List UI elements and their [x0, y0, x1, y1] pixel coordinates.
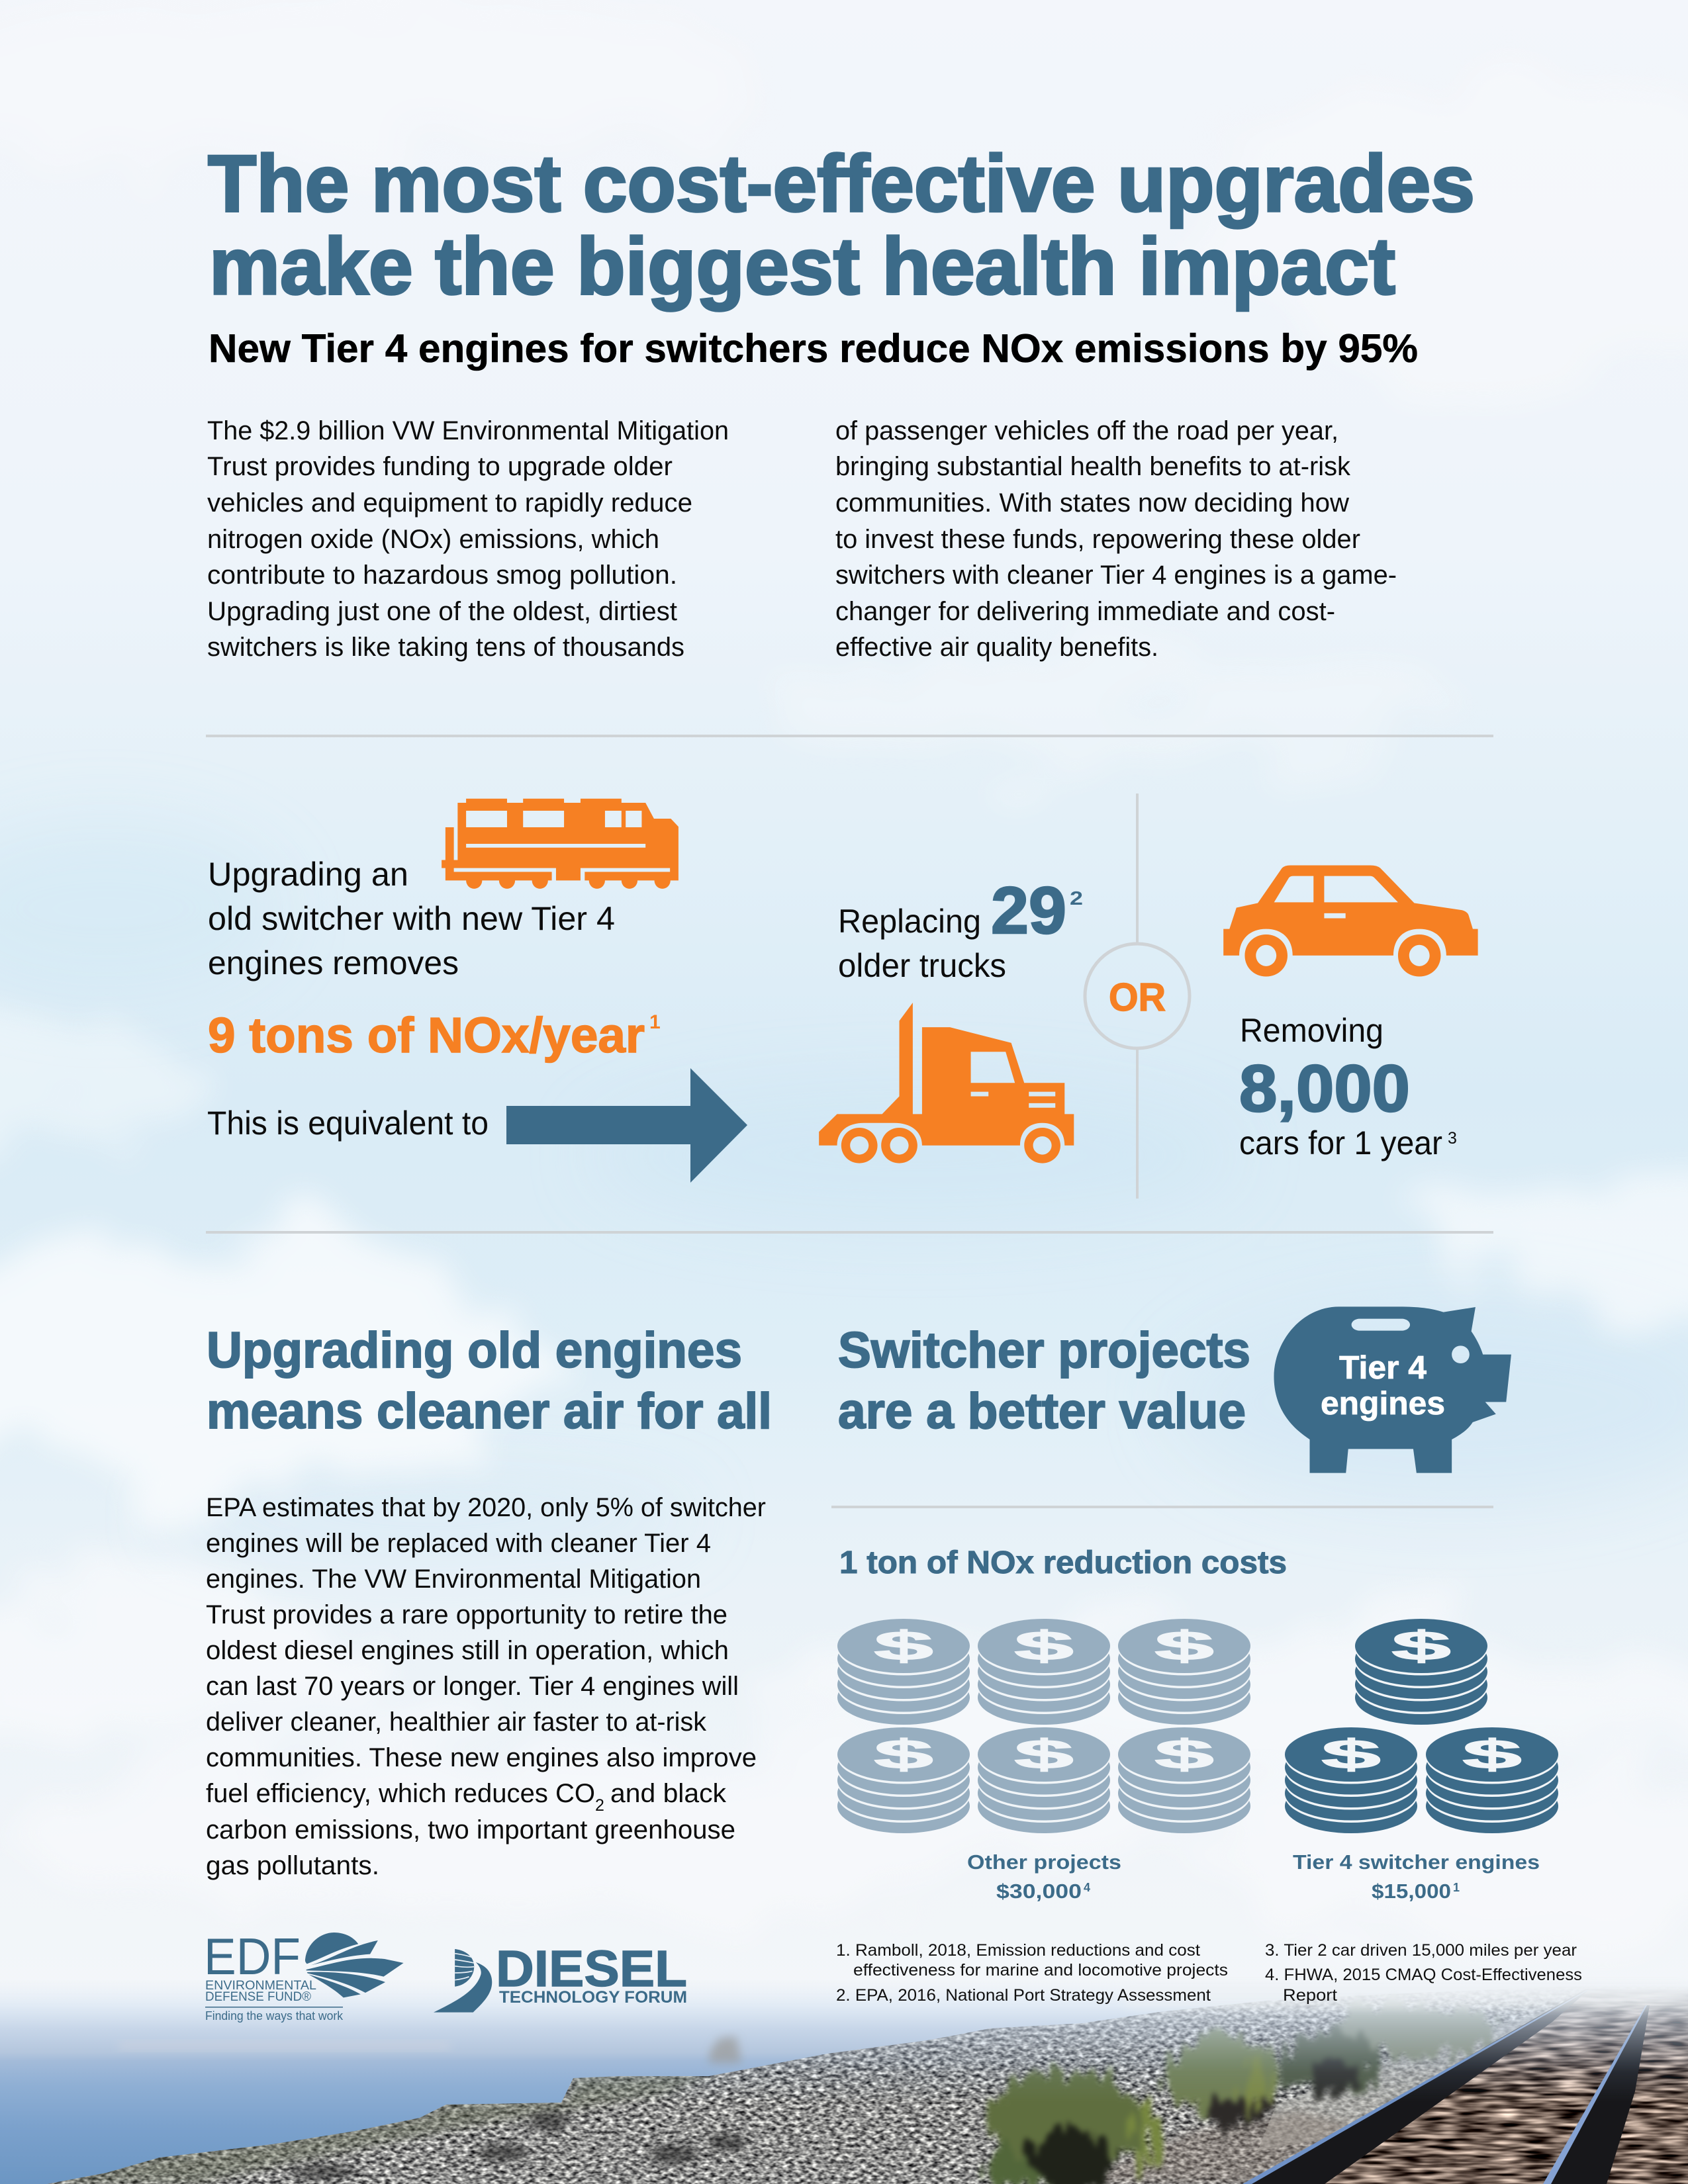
callout: 9 tons of NOx per year: 1: [649, 1011, 661, 1033]
paragraph: EPA estimates: fuel efficiency, which reduces CO: [206, 1779, 595, 1808]
paragraph: EPA estimates: [206, 1493, 766, 1880]
title: make the biggest health impact: [209, 221, 1395, 311]
intro text: left column: [207, 416, 729, 662]
arrow: [506, 1068, 747, 1183]
text: removing 8,000 cars for 1 year: Removing: [1240, 1012, 1383, 1049]
paragraph: EPA estimates: Trust provides a rare opportunity to retire the: [206, 1600, 727, 1629]
OR divider: [1085, 794, 1190, 1199]
intro text: left column: Upgrading just one of the oldest, dirtiest: [207, 597, 677, 626]
icon: truck: [819, 1003, 1074, 1163]
heading: upgrading old engines: means cleaner air for all: [207, 1383, 772, 1439]
paragraph: EPA estimates: EPA estimates that by 2020, only 5% of switcher: [206, 1493, 766, 1522]
logo: Environmental Defense Fund: Finding the ways that work: [205, 2009, 344, 2023]
intro text: right column: [835, 416, 1397, 662]
footnotes: left column: 1. Ramboll, 2018, Emission reductions and cost: [836, 1941, 1200, 1960]
logo: Environmental Defense Fund: ENVIRONMENTAL: [205, 1979, 316, 1993]
coin stacks: other projects: $: [1154, 1732, 1214, 1778]
rock in the water: [709, 2036, 741, 2063]
text: replacing 29 older trucks: 2: [1070, 888, 1083, 909]
text: removing 8,000 cars for 1 year: cars for 1 year: [1239, 1124, 1442, 1161]
icon: piggy bank: Tier 4: [1339, 1350, 1427, 1386]
heading: 1 ton of NOx reduction costs: 1 ton of NOx reduction costs: [839, 1545, 1287, 1580]
text: upgrading an old switcher: [208, 856, 615, 981]
icon: piggy bank: engines: [1321, 1386, 1445, 1422]
lake water: [0, 1979, 1688, 2184]
intro text: left column: switchers is like taking tens of thousands: [207, 633, 684, 662]
heading: switcher projects: are a better value: [838, 1383, 1246, 1439]
text: upgrading an old switcher: old switcher with new Tier 4: [208, 900, 615, 937]
text: replacing 29 older trucks: Replacing: [838, 903, 981, 940]
footnotes: right column: 4. FHWA, 2015 CMAQ Cost-Effectiveness: [1265, 1966, 1582, 1984]
paragraph: EPA estimates: gas pollutants.: [206, 1851, 379, 1880]
label: other projects cost: 4: [1084, 1881, 1090, 1894]
paragraph: EPA estimates: 2: [595, 1796, 604, 1815]
callout: 9 tons of NOx per year: 9 tons of NOx/year: [208, 1007, 645, 1063]
intro text: right column: switchers with cleaner Tier 4 engines is a game-: [835, 561, 1397, 590]
coin stacks: other projects: $: [874, 1623, 933, 1669]
icon: piggy bank: [1274, 1306, 1511, 1473]
text: removing 8,000 cars for 1 year: [1239, 1012, 1457, 1161]
coin stacks: Tier 4 switcher engines: $: [1321, 1732, 1381, 1778]
heading: upgrading old engines: [207, 1322, 772, 1439]
paragraph: EPA estimates: deliver cleaner, healthier air faster to at-risk: [206, 1707, 707, 1737]
heading: switcher projects: Switcher projects: [838, 1322, 1250, 1379]
footnotes: right column: 3. Tier 2 car driven 15,000 miles per year: [1265, 1941, 1577, 1960]
railway rails: [1248, 1989, 1590, 2184]
paragraph: EPA estimates: communities. These new engines also improve: [206, 1743, 757, 1772]
logo: Environmental Defense Fund: DEFENSE FUND®: [205, 1990, 311, 2004]
footnotes: left column: [836, 1941, 1228, 2005]
label: Tier 4 switcher cost: $15,000: [1372, 1880, 1451, 1903]
paragraph: EPA estimates: can last 70 years or longer. Tier 4 engines will: [206, 1672, 739, 1701]
intro text: right column: changer for delivering immediate and cost-: [835, 597, 1335, 626]
footnotes: left column: 2. EPA, 2016, National Port Strategy Assessment: [836, 1986, 1211, 2005]
intro text: left column: contribute to hazardous smog pollution.: [207, 561, 677, 590]
text: upgrading an old switcher: Upgrading an: [208, 856, 408, 893]
text: removing 8,000 cars for 1 year: 8,000: [1239, 1052, 1410, 1126]
logo: Diesel Technology Forum: [434, 1940, 687, 2013]
intro text: left column: Trust provides funding to upgrade older: [207, 452, 673, 481]
text: upgrading an old switcher: engines removes: [208, 944, 459, 981]
label: other projects cost: $30,000: [996, 1880, 1082, 1903]
text: replacing 29 older trucks: 29: [991, 874, 1066, 948]
logo: Environmental Defense Fund: [204, 1927, 404, 2023]
coin stacks: other projects: $: [874, 1732, 933, 1778]
text: this is equivalent to: This is equivalent to: [207, 1105, 489, 1142]
text: replacing 29 older trucks: [838, 874, 1083, 984]
label: other projects cost: [967, 1850, 1121, 1903]
shrubs: [983, 1999, 1493, 2184]
background: lake, gravel bank and railway photo: [0, 1979, 1688, 2184]
label: other projects cost: Other projects: [967, 1850, 1121, 1874]
text: removing 8,000 cars for 1 year: 3: [1448, 1129, 1457, 1148]
coin stacks: other projects: [837, 1619, 1250, 1833]
intro text: right column: of passenger vehicles off the road per year,: [835, 416, 1338, 445]
paragraph: EPA estimates: carbon emissions, two important greenhouse: [206, 1815, 735, 1844]
logo: Diesel Technology Forum: DIESEL: [496, 1940, 687, 1997]
intro text: right column: to invest these funds, repowering these older: [835, 525, 1360, 554]
label: Tier 4 switcher cost: Tier 4 switcher engines: [1293, 1850, 1540, 1874]
subtitle: New Tier 4 engines for switchers reduce NOx emissions by 95%: [209, 326, 1418, 371]
footnotes: right column: Report: [1283, 1986, 1337, 2005]
label: Tier 4 switcher cost: 1: [1453, 1881, 1460, 1894]
intro text: left column: nitrogen oxide (NOx) emissions, which: [207, 525, 659, 554]
coin stacks: Tier 4 switcher engines: [1285, 1619, 1558, 1833]
coin stacks: other projects: $: [1014, 1623, 1074, 1669]
icon: car: [1223, 866, 1478, 977]
text: replacing 29 older trucks: older trucks: [838, 947, 1006, 984]
intro text: left column: vehicles and equipment to rapidly reduce: [207, 488, 692, 518]
intro text: right column: bringing substantial health benefits to at-risk: [835, 452, 1351, 481]
label: Tier 4 switcher cost: [1293, 1850, 1540, 1903]
paragraph: EPA estimates: oldest diesel engines still in operation, which: [206, 1636, 729, 1665]
OR divider: OR: [1109, 976, 1166, 1019]
coin stacks: other projects: $: [1154, 1623, 1214, 1669]
coin stacks: other projects: $: [1014, 1732, 1074, 1778]
logo: Environmental Defense Fund: EDF: [204, 1927, 301, 1985]
intro text: left column: The $2.9 billion VW Environmental Mitigation: [207, 416, 729, 445]
intro text: right column: effective air quality benefits.: [835, 633, 1158, 662]
railway ties: [1325, 1992, 1688, 2184]
paragraph: EPA estimates: engines. The VW Environmental Mitigation: [206, 1565, 701, 1594]
heading: upgrading old engines: Upgrading old engines: [207, 1322, 742, 1379]
intro text: right column: communities. With states now deciding how: [835, 488, 1349, 518]
coin stacks: Tier 4 switcher engines: $: [1391, 1623, 1451, 1669]
light ballast strip: [1258, 2011, 1546, 2151]
gravel bank: [48, 1991, 1577, 2184]
haze along the top of the land: [1125, 1984, 1688, 2008]
footnotes: right column: [1265, 1941, 1582, 2005]
paragraph: EPA estimates: engines will be replaced with cleaner Tier 4: [206, 1529, 711, 1558]
logo: Diesel Technology Forum: TECHNOLOGY FORUM: [499, 1988, 687, 2007]
footnotes: left column: effectiveness for marine and locomotive projects: [853, 1961, 1228, 1979]
title: [208, 138, 1475, 311]
heading: switcher projects: [838, 1322, 1250, 1439]
paragraph: EPA estimates: and black: [610, 1779, 727, 1808]
coin stacks: Tier 4 switcher engines: $: [1462, 1732, 1522, 1778]
title: The most cost-effective upgrades: [208, 138, 1475, 228]
icon: switcher locomotive: [442, 799, 679, 889]
